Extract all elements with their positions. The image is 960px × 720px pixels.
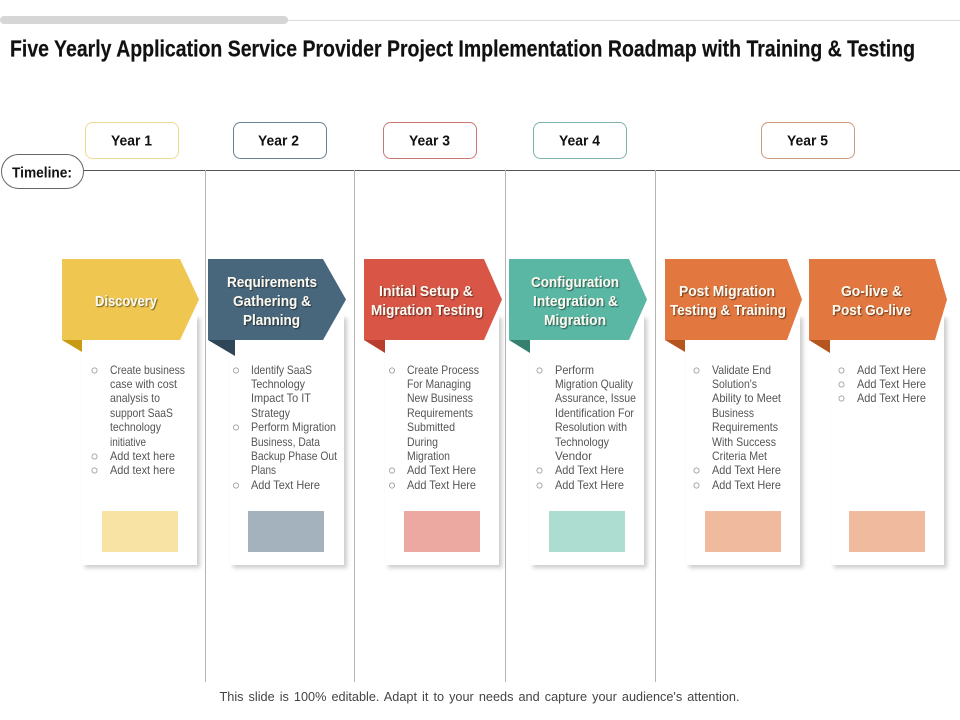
bullet text: New Business xyxy=(407,391,473,405)
year 3 label xyxy=(384,122,476,158)
bullet text: Create business xyxy=(110,363,185,377)
ribbon heading: Migration Testing xyxy=(371,302,483,319)
panel: post migration testing and training xyxy=(665,259,802,565)
year 5 label xyxy=(762,122,854,158)
bullet text: With Success xyxy=(712,435,776,449)
ribbon arrow xyxy=(62,259,199,340)
bullet text: Requirements xyxy=(712,420,778,434)
bullet text xyxy=(110,363,185,477)
ribbon heading: Integration & xyxy=(533,293,618,310)
bullet text: Identification For xyxy=(555,406,634,420)
timeline label xyxy=(2,154,84,188)
year 3 label: Year 3 xyxy=(409,132,450,150)
bullet text: Solution's xyxy=(712,377,757,391)
bullet text: Technology xyxy=(251,377,305,391)
bullet text xyxy=(251,363,338,492)
ribbon heading: Testing & Training xyxy=(670,302,786,319)
bullet text: Add Text Here xyxy=(407,463,476,477)
color swatch xyxy=(102,511,178,552)
ribbon heading xyxy=(227,274,317,329)
bullet text: Migration Quality xyxy=(555,377,633,391)
panel: requirements gathering and planning xyxy=(208,259,346,565)
ribbon heading: Initial Setup & xyxy=(379,283,473,300)
color swatch xyxy=(849,511,925,552)
bullet text: Requirements xyxy=(407,406,473,420)
bullet text: Create Process xyxy=(407,363,479,377)
ribbon heading: Migration xyxy=(544,312,606,329)
bullet text: Plans xyxy=(251,463,276,477)
bullet text xyxy=(555,363,636,492)
bullet text: Technology xyxy=(555,435,609,449)
bullet text: Add Text Here xyxy=(712,463,781,477)
ribbon heading: Post Migration xyxy=(679,283,775,300)
ribbon arrow xyxy=(665,259,802,340)
ribbon heading: Gathering & xyxy=(233,293,311,310)
ribbon heading xyxy=(670,283,786,319)
ribbon fold xyxy=(809,340,830,353)
ribbon heading xyxy=(832,283,911,319)
bullet text: Add Text Here xyxy=(857,391,926,405)
ribbon heading: Go-live & xyxy=(841,283,902,300)
bullet text: support SaaS xyxy=(110,406,173,420)
bullet text: Assurance, Issue xyxy=(555,391,636,405)
bullet markers xyxy=(389,368,395,488)
bullet text xyxy=(857,363,926,405)
bullet text: Add Text Here xyxy=(857,363,926,377)
ribbon arrow xyxy=(509,259,647,340)
ribbon arrow xyxy=(208,259,346,340)
bullet text: Add Text Here xyxy=(712,478,781,492)
bullet markers xyxy=(537,368,542,488)
bullet text: analysis to xyxy=(110,391,160,405)
bullet text: Submitted xyxy=(407,420,455,434)
bullet text: Impact To IT xyxy=(251,391,312,405)
ribbon arrow xyxy=(809,259,947,340)
bullet text: Backup Phase Out xyxy=(251,449,338,463)
bullet markers xyxy=(233,368,239,488)
color swatch xyxy=(705,511,781,552)
bullet text: Add Text Here xyxy=(251,478,320,492)
bullet text: Ability to Meet xyxy=(712,391,782,405)
ribbon heading xyxy=(531,274,619,329)
timeline axis xyxy=(80,170,960,682)
panel: initial setup and migration testing xyxy=(364,259,502,565)
ribbon heading: Configuration xyxy=(531,274,619,291)
ribbon fold xyxy=(208,340,235,356)
bullet text: For Managing xyxy=(407,377,471,391)
bullet text: initiative xyxy=(110,435,146,449)
bullet text: Add Text Here xyxy=(555,463,624,477)
ribbon heading: Discovery xyxy=(95,293,158,310)
bullet text xyxy=(407,363,479,492)
year 2 label xyxy=(234,122,326,158)
bullet text: Business, Data xyxy=(251,435,320,449)
panel: discovery xyxy=(62,259,199,565)
year 5 label: Year 5 xyxy=(787,132,828,150)
ribbon heading: Post Go-live xyxy=(832,302,911,319)
footer note: This slide is 100% editable. Adapt it to your needs and capture your audience's attention. xyxy=(220,690,740,704)
ribbon heading: Requirements xyxy=(227,274,317,291)
ribbon heading xyxy=(371,283,483,319)
color swatch xyxy=(404,511,480,552)
bullet text: Migration xyxy=(407,449,450,463)
bullet text: Perform Migration xyxy=(251,420,336,434)
bullet text: technology xyxy=(110,420,161,434)
bullet text: Validate End xyxy=(712,363,771,377)
panel: go-live and post go-live xyxy=(809,259,947,565)
color swatch xyxy=(549,511,625,552)
bullet text: Criteria Met xyxy=(712,449,768,463)
bullet text: Identify SaaS xyxy=(251,363,312,377)
bullet text: During xyxy=(407,435,438,449)
year 1 label xyxy=(86,122,178,158)
year 4 label: Year 4 xyxy=(559,132,601,150)
bullet text: Strategy xyxy=(251,406,290,420)
ribbon fold xyxy=(62,340,82,352)
bullet text: Business xyxy=(712,406,754,420)
year 1 label: Year 1 xyxy=(111,132,152,150)
bullet text: case with cost xyxy=(110,377,178,391)
year 4 label xyxy=(534,122,626,158)
bullet markers xyxy=(694,368,699,488)
bullet text: Vendor xyxy=(555,449,592,463)
bullet text: Add Text Here xyxy=(555,478,624,492)
year 2 label: Year 2 xyxy=(258,132,299,150)
top decorative progress bar xyxy=(0,16,960,24)
bullet markers xyxy=(839,368,844,401)
bullet text xyxy=(712,363,782,492)
ribbon fold xyxy=(364,340,385,353)
bullet text: Add Text Here xyxy=(857,377,926,391)
bullet text: Add text here xyxy=(110,449,175,463)
color swatch xyxy=(248,511,324,552)
bullet text: Resolution with xyxy=(555,420,627,434)
bullet text: Perform xyxy=(555,363,594,377)
panel: configuration integration and migration xyxy=(509,259,647,565)
bullet text: Add Text Here xyxy=(407,478,476,492)
bullet text: Add text here xyxy=(110,463,175,477)
ribbon arrow xyxy=(364,259,502,340)
ribbon fold xyxy=(665,340,685,352)
bullet markers xyxy=(92,368,97,473)
ribbon heading: Planning xyxy=(243,312,300,329)
ribbon fold xyxy=(509,340,530,353)
timeline label: Timeline: xyxy=(12,164,72,182)
